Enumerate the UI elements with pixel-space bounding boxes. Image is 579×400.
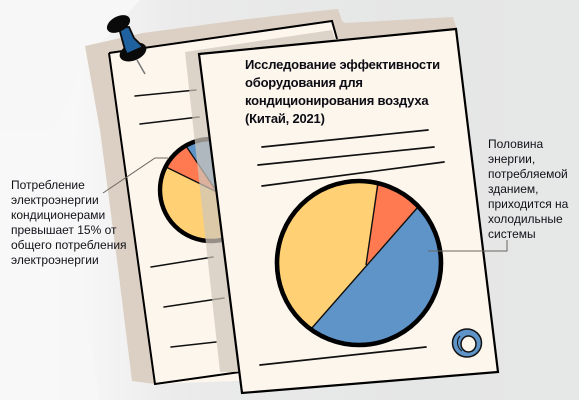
front paper shadow (185, 30, 335, 372)
callout: left (11, 158, 168, 267)
title: Исследование эффективности (245, 57, 440, 72)
title: оборудования для (245, 75, 363, 90)
back page text lines (135, 90, 224, 347)
front page (199, 29, 498, 393)
right callout text: системы (488, 227, 536, 241)
icon: ring seal (452, 329, 482, 357)
leader line left (103, 158, 168, 193)
leader line right (428, 240, 507, 251)
back page (109, 21, 337, 384)
left callout text: общего потребления (11, 238, 127, 252)
needle (137, 60, 145, 74)
icon: push pin (104, 12, 149, 74)
left callout text: Потребление (11, 178, 85, 192)
title: (Китай, 2021) (245, 111, 325, 126)
panel: back paper (85, 9, 457, 384)
small pie chart (158, 136, 222, 244)
front page text lines (258, 130, 444, 365)
left callout text: кондиционерами (11, 208, 105, 222)
callout: right (428, 137, 572, 251)
right callout text: энергии, (488, 152, 535, 166)
right callout text: холодильные (488, 212, 563, 226)
pin body (119, 27, 143, 54)
left callout text: превышает 15% от (11, 223, 117, 237)
paper shadow (85, 9, 457, 384)
left callout text: электроэнергии (11, 253, 99, 267)
pin base (117, 39, 149, 65)
title: кондиционирования воздуха (245, 93, 429, 108)
big pie chart (274, 178, 444, 348)
panel: front paper (199, 29, 498, 393)
right callout text: Половина (488, 137, 544, 151)
right callout text: приходится на (488, 197, 569, 211)
right callout text: потребляемой (488, 167, 568, 181)
right callout text: зданием, (488, 182, 539, 196)
left callout text: электроэнергии (11, 193, 99, 207)
back page outline (109, 21, 337, 384)
pin head (104, 12, 133, 36)
